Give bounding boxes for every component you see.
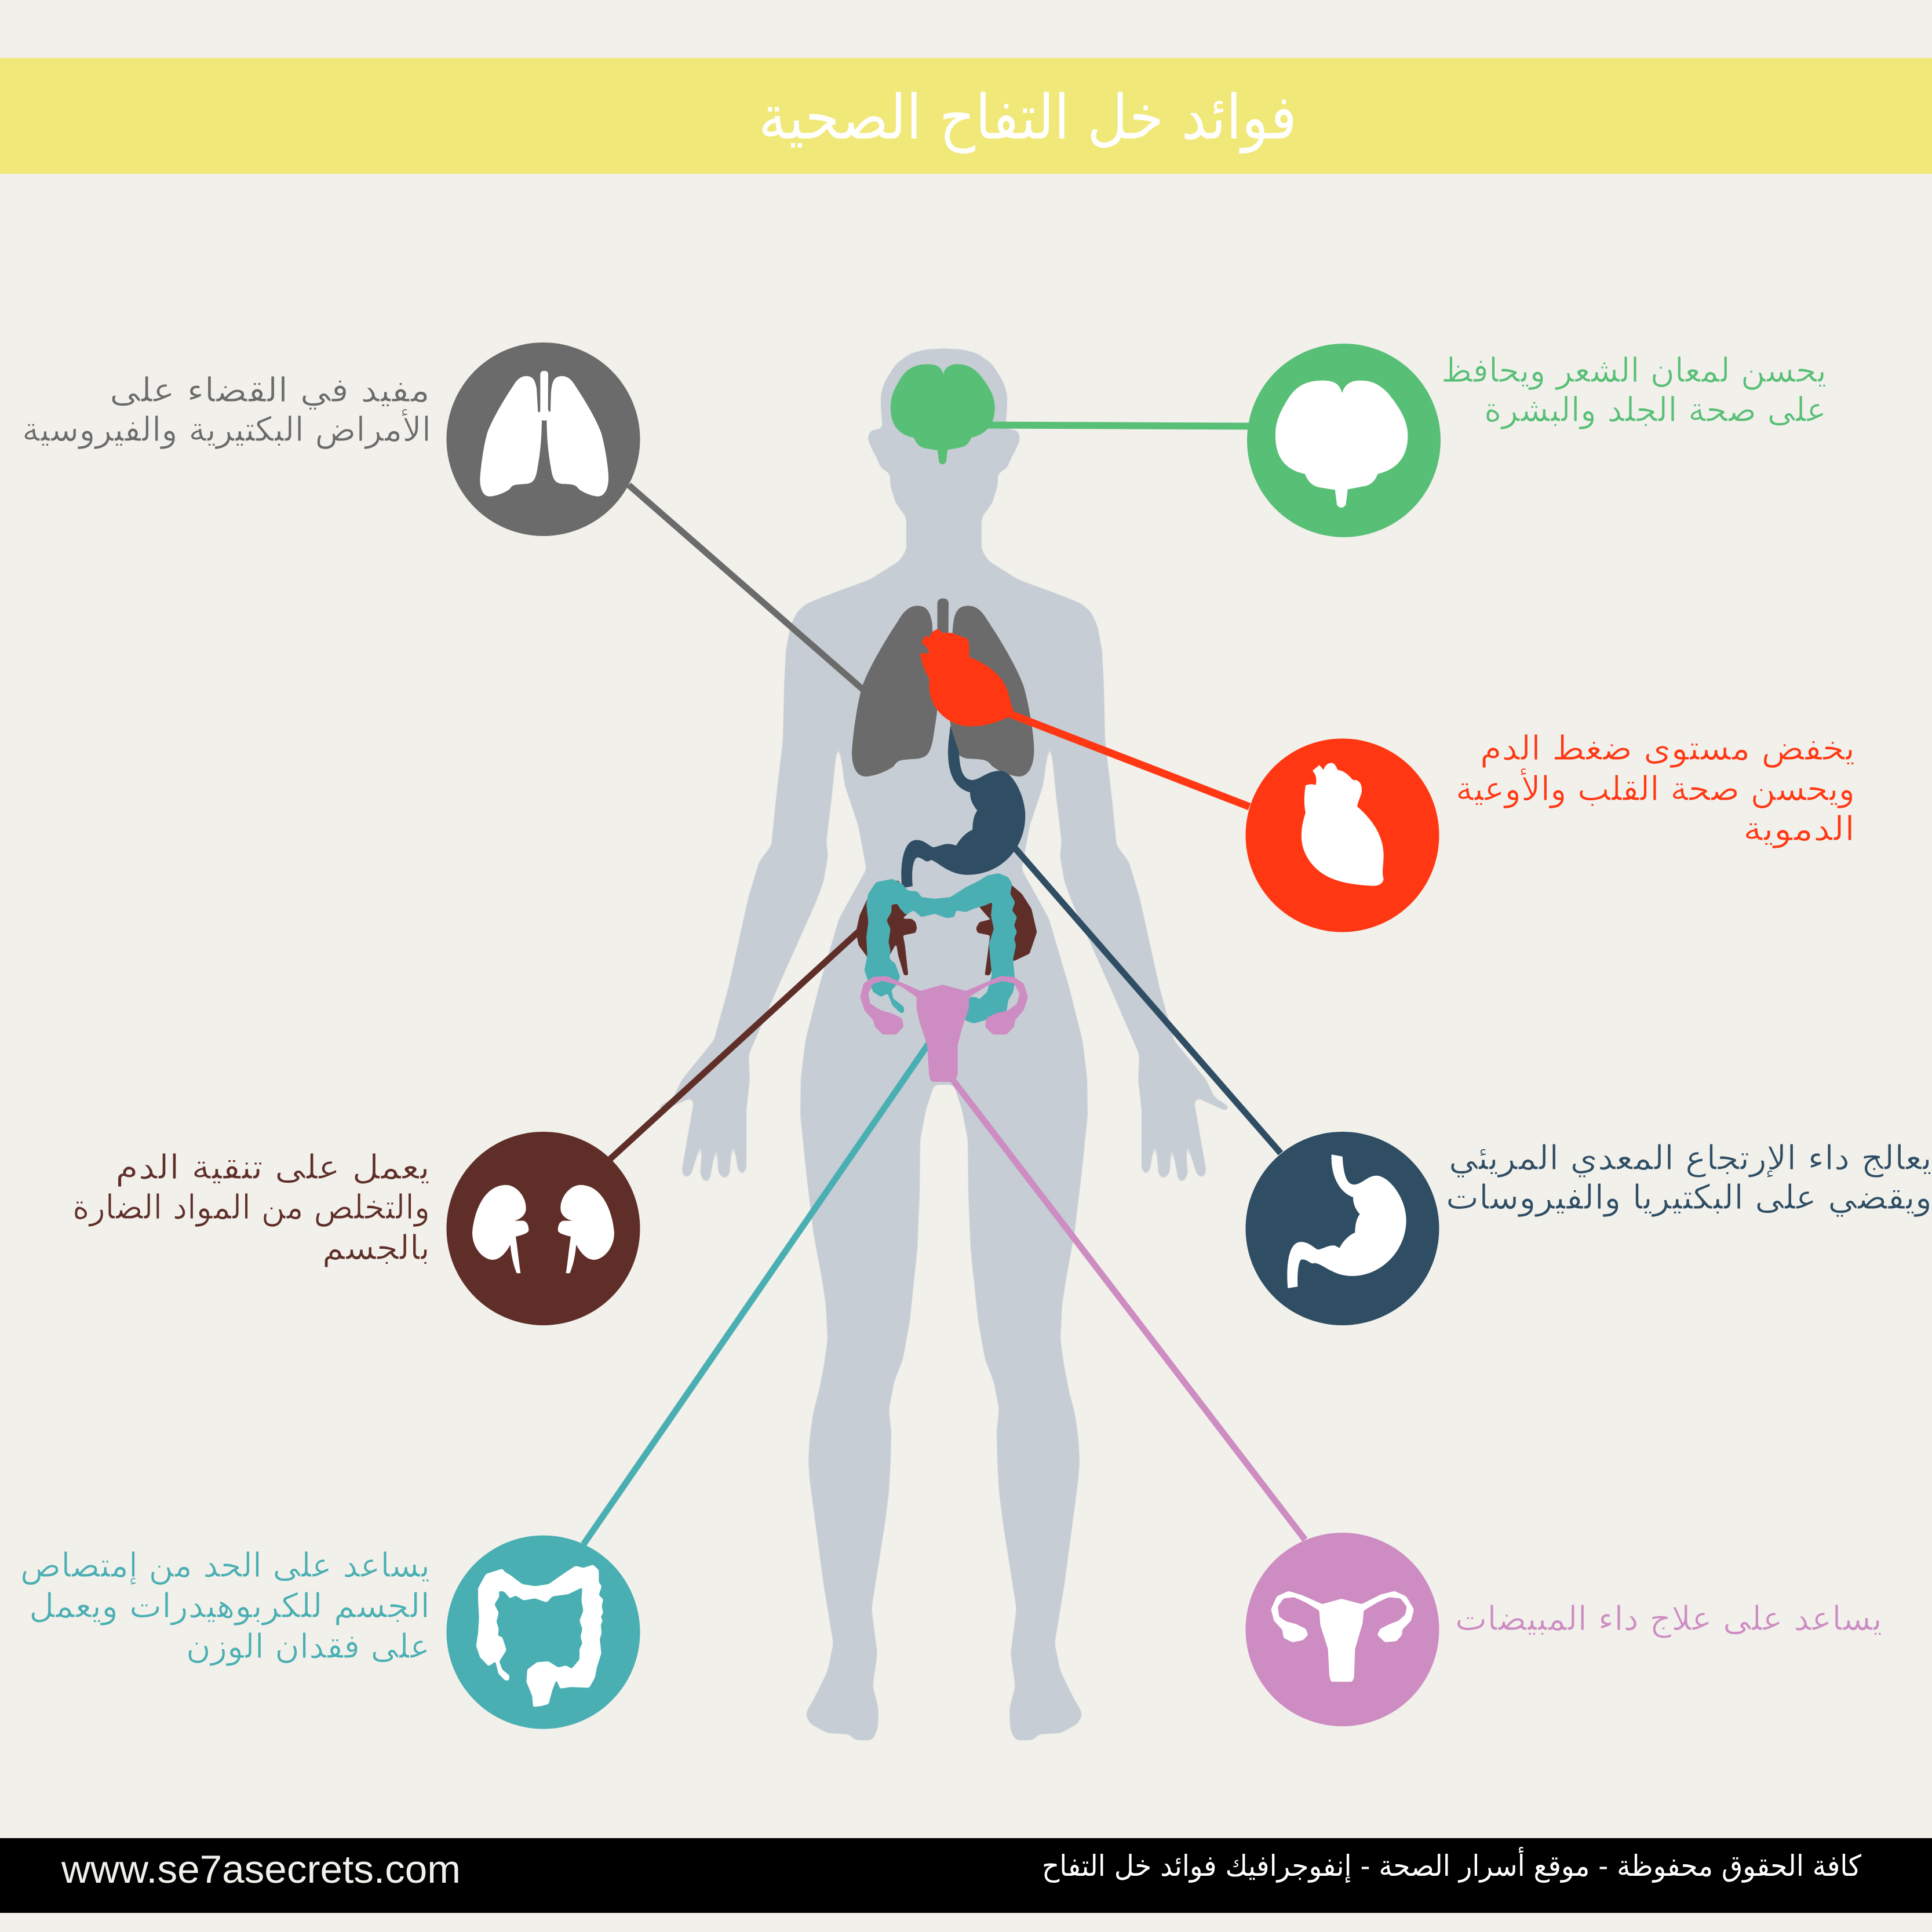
- icon: kidneys circle: [446, 1132, 640, 1325]
- organ: brain in body: [891, 364, 995, 464]
- footer bar: [0, 1838, 1932, 1913]
- text: colon benefit: الجسم للكربوهيدرات ويعمل: [29, 1586, 430, 1626]
- organ: lungs in body: [852, 599, 1034, 777]
- icon: uterus circle: [1246, 1533, 1439, 1726]
- text: stomach benefit: [1446, 1138, 1932, 1217]
- icon: stomach circle: [1246, 1132, 1439, 1325]
- text: lungs benefit: الأمراض البكتيرية والفيروسية: [22, 409, 431, 450]
- organ: heart in body: [920, 629, 1015, 726]
- organ: stomach in body: [901, 726, 1025, 888]
- connector: colon: [584, 1037, 933, 1544]
- connector: uterus: [950, 1077, 1305, 1540]
- text: stomach benefit: يعالج داء الإرتجاع المعدي المريئي: [1449, 1138, 1932, 1178]
- text: heart benefit: يخفض مستوى ضغط الدم: [1480, 728, 1855, 768]
- text: lungs benefit: مفيد في القضاء على: [110, 370, 430, 410]
- text: heart benefit: ويحسن صحة القلب والأوعية: [1456, 768, 1855, 809]
- panel: stomach benefit: [1246, 1132, 1932, 1325]
- footer website: www.se7asecrets.com: [61, 1847, 461, 1891]
- icon: heart circle: [1246, 738, 1439, 932]
- connector: heart: [1008, 713, 1249, 807]
- panel: brain benefit: [1247, 344, 1827, 537]
- text: stomach benefit: ويقضي على البكتيريا والفيروسات: [1446, 1178, 1932, 1217]
- text: kidney benefit: والتخلص من المواد الضارة: [72, 1187, 430, 1227]
- panel: kidney benefit: [72, 1132, 640, 1325]
- text: kidney benefit: يعمل على تنقية الدم: [115, 1147, 430, 1187]
- text: kidney benefit: بالجسم: [322, 1228, 430, 1267]
- text: colon benefit: على فقدان الوزن: [186, 1627, 430, 1667]
- text: lungs benefit: [22, 370, 431, 450]
- text: kidney benefit: [72, 1147, 430, 1267]
- panel: colon benefit: [20, 1536, 640, 1729]
- organ: uterus in body: [860, 976, 1028, 1082]
- text: heart benefit: الدموية: [1743, 809, 1855, 849]
- text: colon benefit: يساعد على الحد من إمتصاص: [20, 1545, 430, 1585]
- text: colon benefit: [20, 1545, 430, 1667]
- text: brain benefit: [1441, 351, 1827, 430]
- panel: heart benefit: [1246, 728, 1855, 932]
- human body silhouette: [657, 348, 1231, 1740]
- footer copyright: كافة الحقوق محفوظة - موقع أسرار الصحة - إنفوجرافيك فوائد خل التفاح: [1042, 1847, 1861, 1883]
- text: heart benefit: [1456, 728, 1855, 849]
- connector: brain: [985, 425, 1252, 427]
- panel: lungs benefit: [22, 342, 640, 536]
- connector: lungs: [629, 485, 866, 692]
- connector: kidneys: [610, 927, 863, 1159]
- organ: kidneys in body: [856, 880, 1037, 975]
- icon: lungs circle: [446, 342, 640, 536]
- title: فوائد خل التفاح الصحية: [759, 82, 1297, 154]
- title banner: [0, 58, 1932, 174]
- panel: uterus benefit: [1246, 1533, 1882, 1726]
- icon: colon circle: [446, 1536, 640, 1729]
- connector: stomach: [1011, 844, 1281, 1153]
- organ: colon in body: [865, 873, 1017, 1023]
- text: brain benefit: يحسن لمعان الشعر ويحافظ: [1441, 351, 1827, 391]
- text: brain benefit: على صحة الجلد والبشرة: [1484, 390, 1827, 430]
- icon: brain circle: [1247, 344, 1441, 537]
- text: uterus benefit: يساعد على علاج داء المبيضات: [1455, 1599, 1882, 1638]
